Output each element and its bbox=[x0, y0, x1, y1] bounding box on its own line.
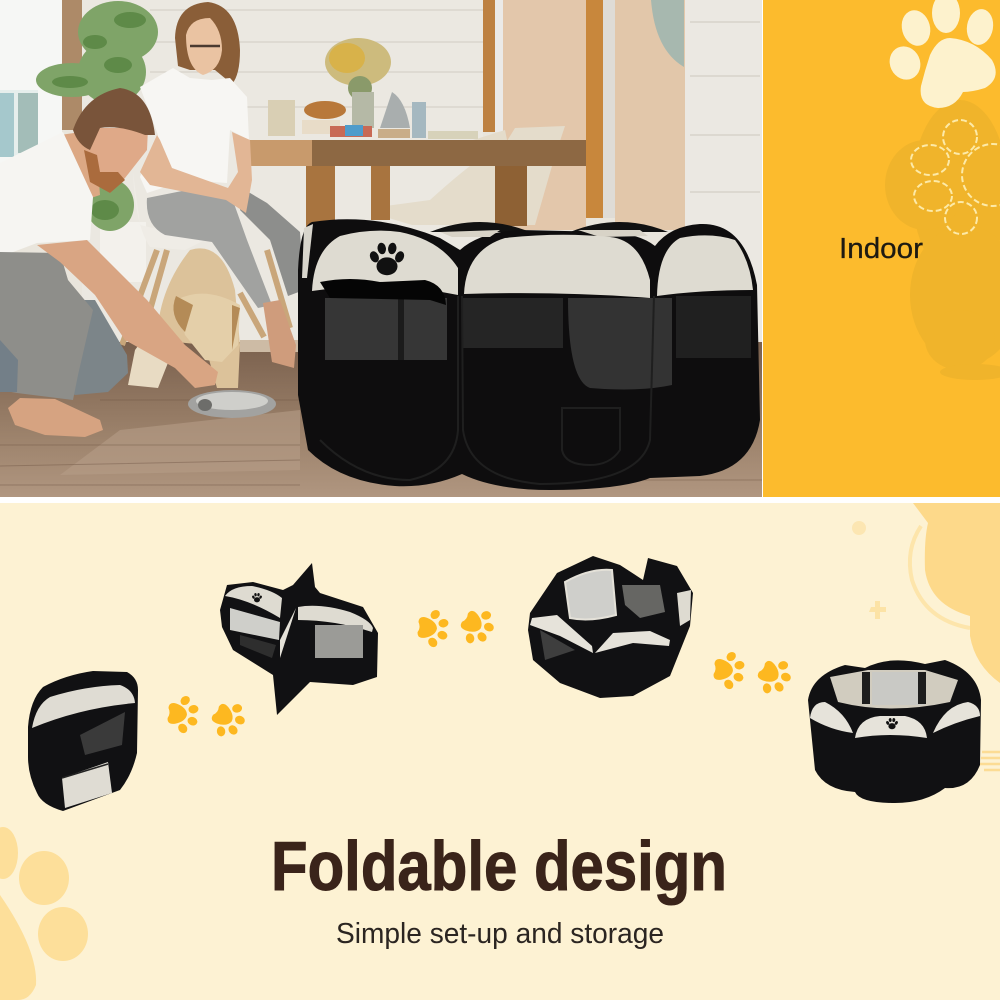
upper leg and hip bbox=[0, 252, 93, 400]
stage 4: fully open pen bbox=[808, 660, 981, 803]
lower leg bbox=[30, 300, 128, 395]
pen body bbox=[298, 219, 760, 490]
right cream panel bbox=[657, 235, 753, 296]
metal food bowl bbox=[188, 390, 276, 418]
left cream panel bbox=[312, 231, 458, 295]
plant bbox=[36, 1, 158, 231]
paws 2 bbox=[416, 601, 502, 652]
edge highlight bbox=[302, 224, 313, 278]
floor bbox=[0, 340, 762, 497]
rolled flap bbox=[320, 279, 446, 305]
left mesh bbox=[325, 298, 447, 360]
near leg bbox=[147, 190, 272, 308]
centre mesh bbox=[463, 298, 563, 348]
stage 1: folded pen bbox=[28, 671, 138, 811]
photo: family feeding dog beside the playpen bbox=[0, 0, 762, 497]
icon: paw bbox=[368, 242, 406, 275]
panel: indoor bbox=[763, 0, 1000, 497]
table items: flowers and dishes bbox=[268, 38, 478, 139]
white chairs bbox=[378, 126, 565, 225]
woman bbox=[122, 2, 304, 368]
dashed plant circles bbox=[911, 120, 1000, 234]
back rim cream bbox=[440, 230, 648, 237]
stage 2: half-open pen bbox=[220, 563, 378, 715]
paws 1 bbox=[166, 693, 253, 745]
heading: Foldable design bbox=[271, 827, 727, 905]
playpen bbox=[298, 219, 760, 490]
round mirror bbox=[651, 0, 684, 67]
room background bbox=[0, 0, 762, 345]
panel: foldable design bbox=[0, 503, 1000, 1000]
subheading: Simple set-up and storage bbox=[336, 918, 664, 950]
label: indoor: Indoor bbox=[839, 233, 923, 265]
faded plant silhouette bbox=[885, 100, 1000, 380]
stool bbox=[122, 250, 290, 345]
seams bbox=[320, 296, 654, 484]
right mesh bbox=[676, 296, 751, 358]
decorative paw bottom left bbox=[0, 827, 88, 1000]
dog bbox=[128, 248, 240, 388]
centre cream panel bbox=[464, 235, 650, 298]
wooden table bbox=[250, 140, 586, 229]
stage 3: opening pen bbox=[528, 556, 693, 698]
paws 3 bbox=[712, 649, 799, 702]
icon: paw bbox=[884, 0, 996, 108]
decorative blob top right bbox=[852, 503, 1000, 770]
man bbox=[0, 88, 218, 437]
far leg bbox=[240, 190, 304, 296]
back rims bbox=[430, 222, 668, 232]
